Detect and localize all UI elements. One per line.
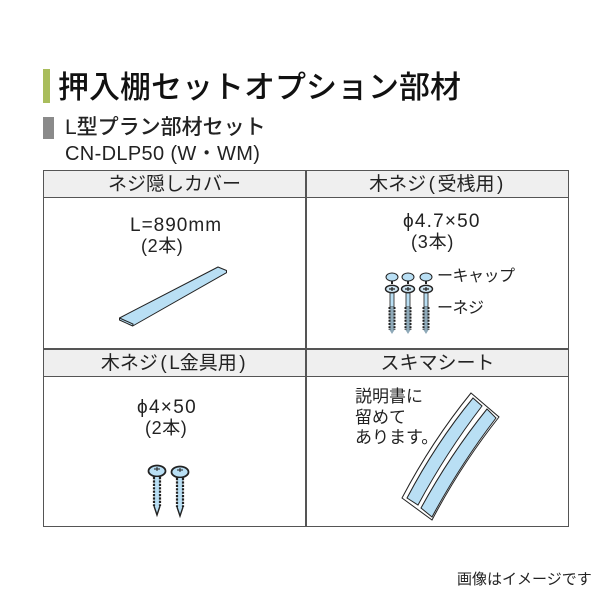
header: screw cover xyxy=(44,171,305,197)
footnote: 画像はイメージです xyxy=(457,571,592,588)
title: 押入棚セットオプション部材 xyxy=(58,70,461,105)
subtitle: L型プラン部材セット xyxy=(65,116,266,139)
text: screw size 2: (2本) xyxy=(145,418,187,438)
model number: CN-DLP50 (W・WM) xyxy=(65,143,260,165)
text: instruction note: 説明書に xyxy=(355,387,423,406)
text: screw size: ϕ4.7×50 xyxy=(403,211,481,232)
text: instruction note: あります。 xyxy=(355,428,438,447)
header: wood screw receiver: 木ネジ(受桟用) xyxy=(369,174,503,195)
icon: screw set 2 xyxy=(402,273,414,334)
subtitle marker xyxy=(43,117,54,139)
icon: screw right xyxy=(172,466,188,516)
label: screw: ーネジ xyxy=(437,300,484,317)
text: instruction note xyxy=(355,387,438,447)
icon: screw set 3 xyxy=(420,273,432,334)
header: gap sheet: スキマシート xyxy=(380,353,494,374)
header: wood screw L bracket xyxy=(44,350,305,376)
title accent bar xyxy=(43,69,50,103)
icon: screw left xyxy=(148,466,166,515)
icon: gap sheet xyxy=(401,392,500,521)
header: gap sheet xyxy=(307,350,568,376)
text: cover length: (2本) xyxy=(141,236,183,256)
text: screw size: (3本) xyxy=(411,232,454,252)
icon: two wood screws xyxy=(148,464,190,518)
label: cap: ーキャップ xyxy=(437,268,515,285)
parts table xyxy=(43,170,569,527)
text: cover length xyxy=(130,215,222,256)
icon: screw cover strip xyxy=(119,266,227,326)
icon: three caps and screws xyxy=(384,272,434,334)
header: wood screw receiver xyxy=(307,171,568,197)
text: screw size xyxy=(403,211,481,252)
header: screw cover: ネジ隠しカバー xyxy=(108,174,241,195)
icon: screw set 1 xyxy=(386,273,398,334)
text: screw size 2 xyxy=(137,397,197,438)
text: screw size 2: ϕ4×50 xyxy=(137,397,197,418)
header: wood screw L bracket: 木ネジ(L金具用) xyxy=(101,353,246,374)
text: instruction note: 留めて xyxy=(355,408,406,426)
text: cover length: L=890mm xyxy=(130,215,222,236)
